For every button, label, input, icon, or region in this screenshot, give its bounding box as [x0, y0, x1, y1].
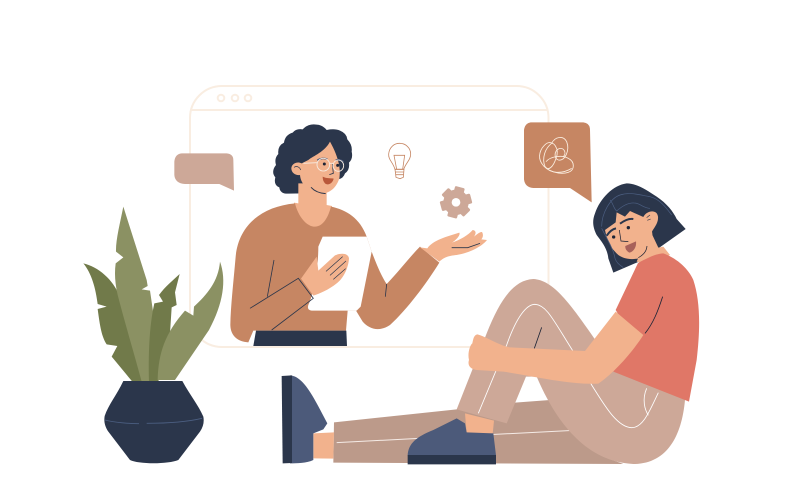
back foot — [313, 432, 334, 459]
icon: empty speech bubble — [174, 153, 234, 191]
hand on paper — [301, 254, 349, 296]
icon: gear — [440, 186, 472, 219]
open hand — [420, 230, 487, 262]
leaf: right — [158, 262, 223, 380]
glasses — [303, 158, 344, 171]
hair highlights — [602, 194, 672, 268]
knee seam — [478, 304, 658, 428]
icon: lightbulb — [389, 143, 411, 179]
face — [602, 194, 672, 268]
sweater — [230, 203, 439, 342]
panel: browser window — [190, 86, 548, 347]
neck and hair — [593, 183, 686, 273]
trousers — [253, 331, 347, 346]
plant — [83, 207, 223, 463]
t-shirt — [613, 253, 699, 402]
sleeve lines — [250, 260, 387, 330]
facial features — [607, 215, 651, 258]
hair — [273, 124, 352, 194]
icon: speech bubble with scribble — [524, 122, 592, 202]
pot band — [105, 418, 202, 424]
neck — [294, 183, 332, 228]
back leg — [282, 375, 623, 464]
hugging arm — [468, 312, 643, 384]
seated client figure — [282, 183, 699, 464]
back shoe — [290, 375, 327, 463]
counsellor figure — [230, 124, 487, 346]
pot — [104, 381, 204, 463]
paper — [308, 237, 372, 311]
leaf: tall centre — [115, 207, 153, 382]
leaf: dark centre — [149, 274, 180, 382]
scribble — [540, 137, 573, 173]
front leg — [457, 279, 685, 464]
facial features — [294, 158, 343, 194]
trouser seam — [337, 430, 573, 443]
leaf: back left — [83, 263, 143, 382]
front shoe — [408, 418, 496, 455]
front ankle — [465, 413, 494, 434]
face — [291, 142, 340, 193]
